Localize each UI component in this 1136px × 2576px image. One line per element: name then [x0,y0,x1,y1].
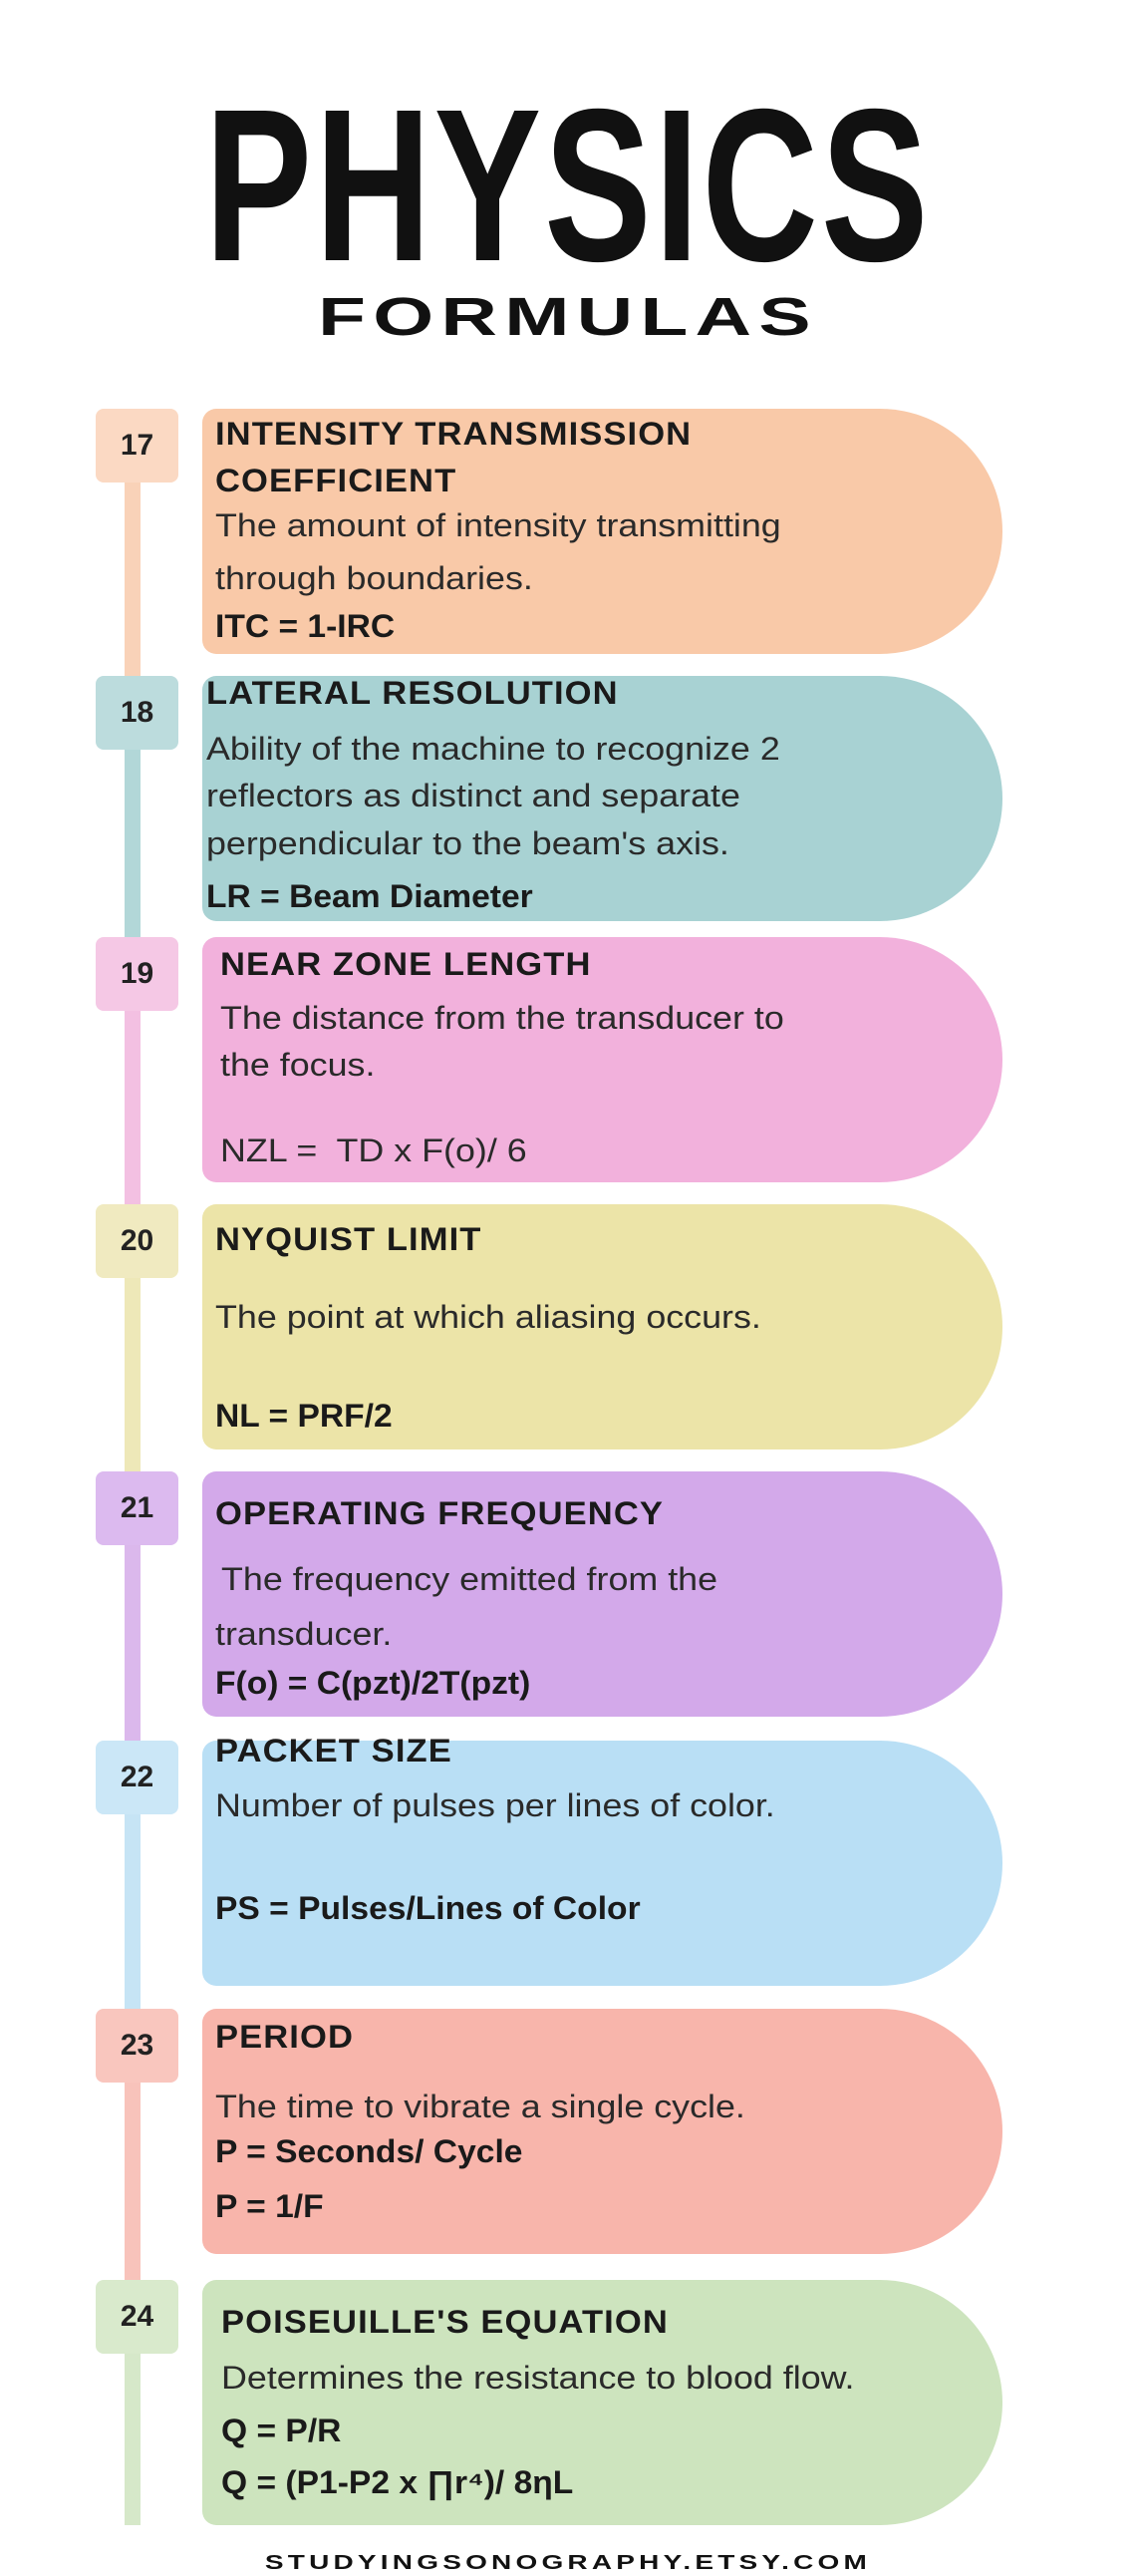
panel: 17 intensity transmission coefficient: through boundaries. [215,560,533,596]
panel: 19 near zone length: the focus. [220,1047,375,1083]
panel: 21 operating frequency [96,1471,1002,1741]
number tab 19 [96,937,178,1011]
panel: 18 lateral resolution: reflectors as distinct and separate [206,778,740,813]
number tab 24: 24 [121,2300,153,2333]
formula: ITC = 1-IRC [215,608,395,644]
panel: 19 near zone length [96,937,1002,1204]
description: The amount of intensity transmitting [215,507,781,543]
number tab 23 [96,2009,178,2083]
panel: 19 near zone length: NEAR ZONE LENGTH [220,946,591,982]
panel: 22 packet size: PACKET SIZE [215,1733,452,1769]
number tab 22: 22 [121,1761,153,1793]
panel: 20 nyquist limit: NL = PRF/2 [215,1398,393,1434]
panel: 24 poiseuille's equation: Q = (P1-P2 x ∏r⁴)/ 8ηL [221,2464,573,2500]
number tab 17: 17 [121,429,153,462]
number tab 18 [96,676,178,750]
number tab 23: 23 [121,2029,153,2062]
panel: 23 period: P = 1/F [215,2188,324,2224]
heading: INTENSITY TRANSMISSION [215,416,692,452]
number tab 19: 19 [121,957,153,990]
panel: 18 lateral resolution: LR = Beam Diameter [206,878,533,914]
panel: 19 near zone length: The distance from the transducer to [220,1000,784,1036]
panel: 24 poiseuille's equation: Q = P/R [221,2413,341,2448]
number tab 21: 21 [121,1491,153,1524]
panel: 23 period: PERIOD [215,2019,354,2055]
panel: 17 intensity transmission coefficient: COEFFICIENT [215,463,456,498]
panel: 19 near zone length: NZL = TD x F(o)/ 6 [220,1132,527,1168]
number tab 24 [96,2280,178,2354]
panel: 23 period: The time to vibrate a single cycle. [215,2089,745,2124]
panel: 21 operating frequency: The frequency emitted from the [221,1561,717,1597]
panel: 18 lateral resolution: perpendicular to the beam's axis. [206,825,729,861]
panel: 20 nyquist limit [96,1204,1002,1471]
panel: 24 poiseuille's equation: Determines the resistance to blood flow. [221,2360,854,2396]
subtitle: FORMULAS [318,287,818,347]
panel: 22 packet size: PS = Pulses/Lines of Color [215,1890,641,1926]
number tab 21 [96,1471,178,1545]
panel: 21 operating frequency: OPERATING FREQUENCY [215,1495,664,1531]
panel: 24 poiseuille's equation: POISEUILLE'S EQUATION [221,2304,669,2340]
number tab 17 [96,409,178,483]
panel: 22 packet size: Number of pulses per lines of color. [215,1787,775,1823]
panel: 21 operating frequency: F(o) = C(pzt)/2T(pzt) [215,1665,530,1701]
panel: 18 lateral resolution: Ability of the machine to recognize 2 [206,731,780,767]
panel: 24 poiseuille's equation [96,2280,1002,2525]
footer: STUDYINGSONOGRAPHY.ETSY.COM [265,2552,871,2574]
panel: 20 nyquist limit: NYQUIST LIMIT [215,1221,481,1257]
number tab 18: 18 [121,696,153,729]
title: PHYSICS [205,65,931,307]
number tab 20 [96,1204,178,1278]
panel: 17 intensity transmission coefficient [96,409,1002,676]
panel: 20 nyquist limit: The point at which aliasing occurs. [215,1299,761,1335]
number tab 22 [96,1741,178,1814]
panel: 23 period [96,2009,1002,2280]
panel: 22 packet size [96,1733,1002,2009]
panel: 18 lateral resolution: LATERAL RESOLUTION [206,675,619,711]
panel: 21 operating frequency: transducer. [215,1616,392,1652]
panel: 23 period: P = Seconds/ Cycle [215,2133,522,2169]
number tab 20: 20 [121,1224,153,1257]
panel: 18 lateral resolution [96,675,1002,937]
